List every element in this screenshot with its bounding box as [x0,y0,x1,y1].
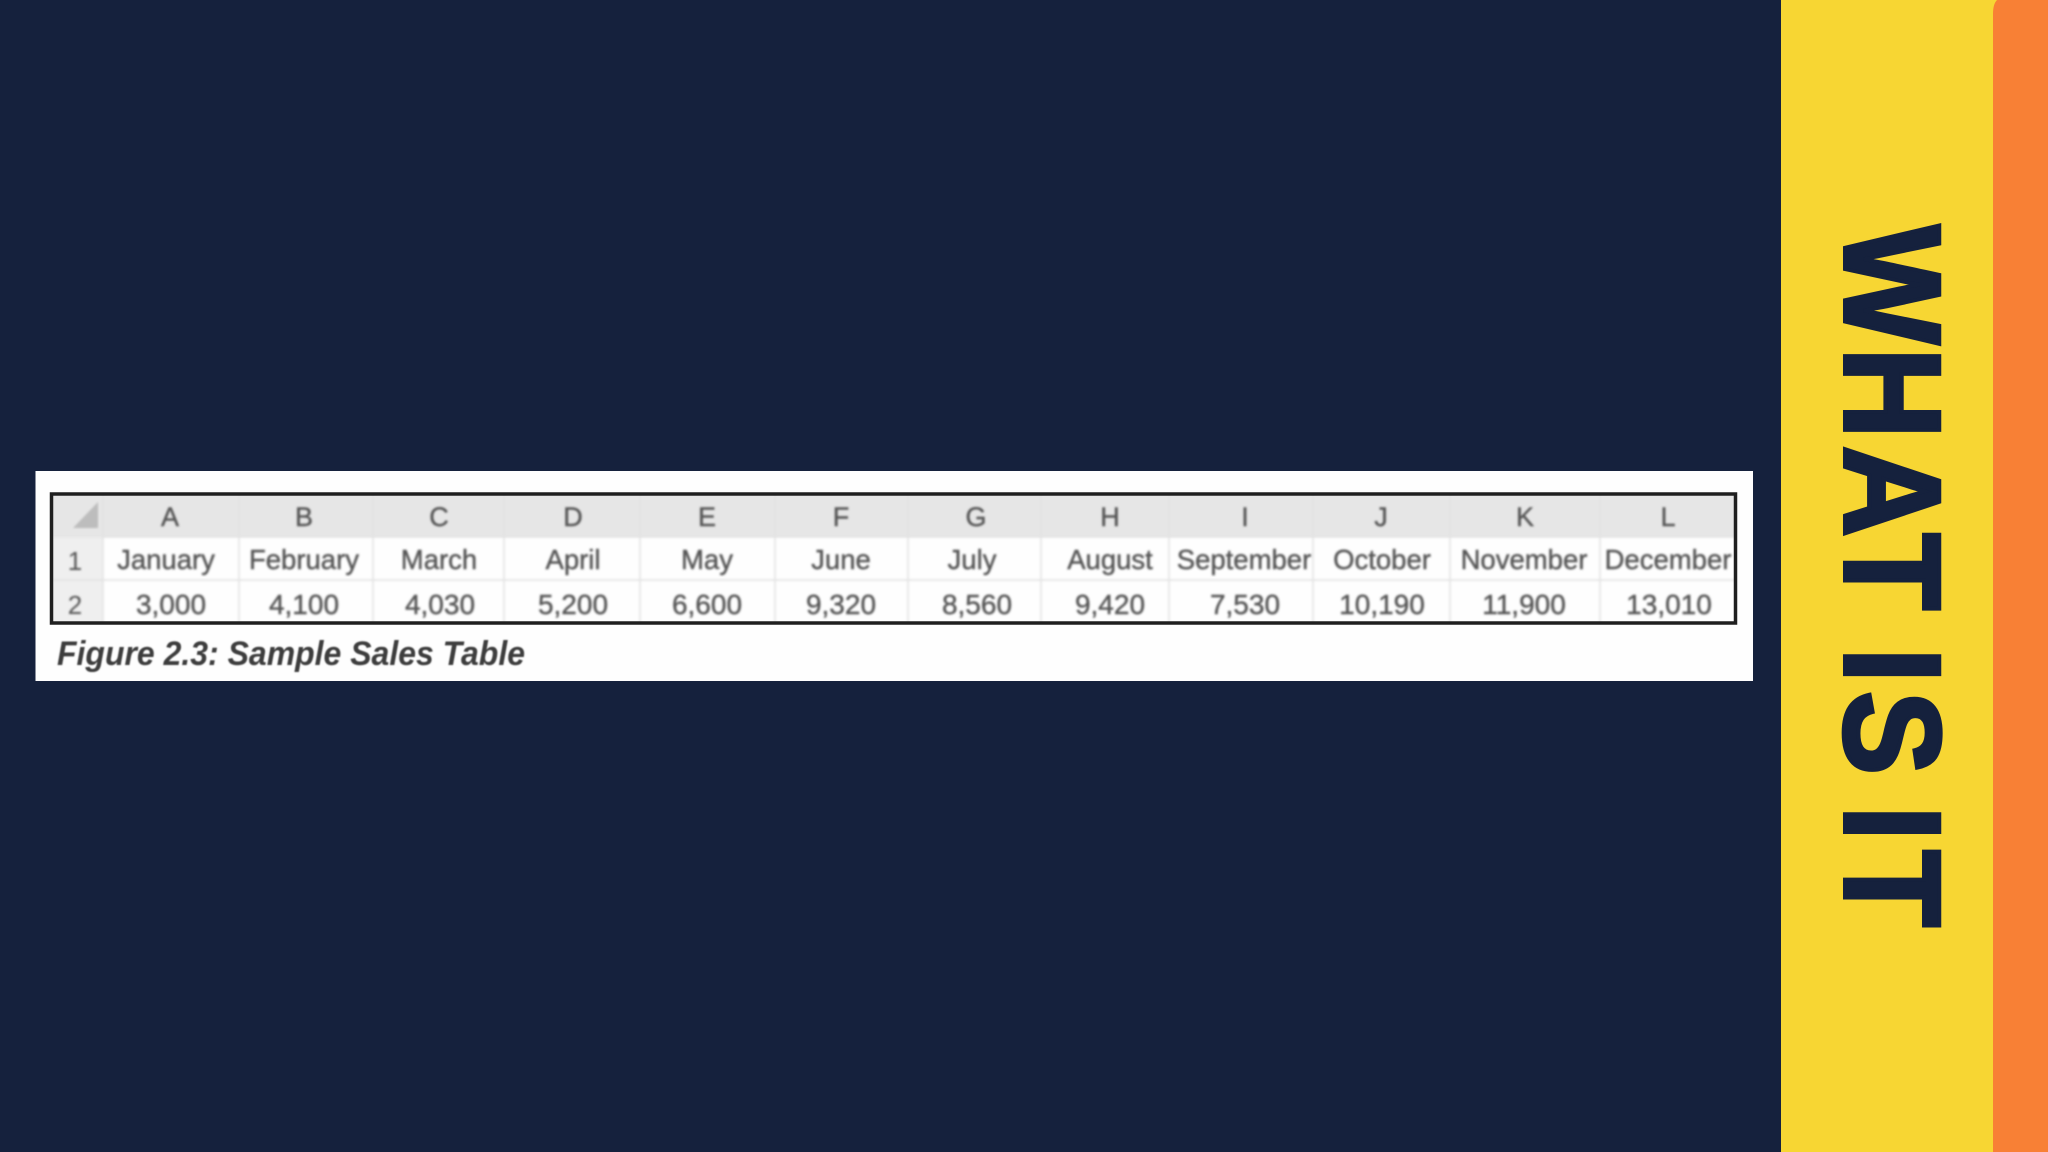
sales values: 10,190 [1339,589,1425,620]
month labels: September [1177,544,1311,575]
column letters: I [1241,502,1249,532]
table grid lines [52,495,1735,622]
month labels: January [117,544,215,575]
month labels: February [249,544,359,575]
column letters: C [429,502,449,532]
month labels: May [681,544,733,575]
column letters: F [833,502,849,532]
column letters: B [295,502,313,532]
column letters [161,502,1676,532]
column letters: H [1100,502,1120,532]
column letters: K [1516,502,1534,532]
icon: select-all triangle [73,502,98,528]
table outer frame [52,494,1736,623]
sales values: 6,600 [672,589,742,620]
month labels: November [1461,544,1587,575]
sales values: 9,320 [806,589,876,620]
month labels: April [545,544,601,575]
figure caption: Figure 2.3: Sample Sales Table [57,635,525,673]
month labels: March [401,544,477,575]
yellow side band [1781,0,2048,1152]
month labels: October [1333,544,1431,575]
sales values: 5,200 [538,589,608,620]
row numbers [68,546,82,620]
column letters: L [1660,502,1676,532]
orange edge band [1993,0,2048,1152]
white image background [36,471,1753,681]
row header band [52,537,103,622]
row numbers: 1 [68,546,82,576]
column header band [52,495,1735,537]
column letters: A [161,502,179,532]
month labels: July [948,544,997,575]
vertical title: WHAT IS IT [1816,225,1969,927]
column letters: G [965,502,987,532]
sales values: 8,560 [942,589,1012,620]
sales values: 4,030 [405,589,475,620]
month labels: August [1067,544,1153,575]
sales values [136,589,1712,620]
sales values: 4,100 [269,589,339,620]
sales values: 13,010 [1626,589,1712,620]
column letters: E [698,502,716,532]
sales values: 3,000 [136,589,206,620]
sales values: 11,900 [1482,589,1566,620]
row numbers: 2 [68,590,82,620]
sales values: 9,420 [1075,589,1145,620]
column letters: D [563,502,583,532]
sales values: 7,530 [1210,589,1280,620]
column letters: J [1374,502,1388,532]
month labels [117,544,1731,575]
month labels: December [1605,544,1731,575]
panel: sample sales table image [36,471,1753,681]
month labels: June [811,544,871,575]
